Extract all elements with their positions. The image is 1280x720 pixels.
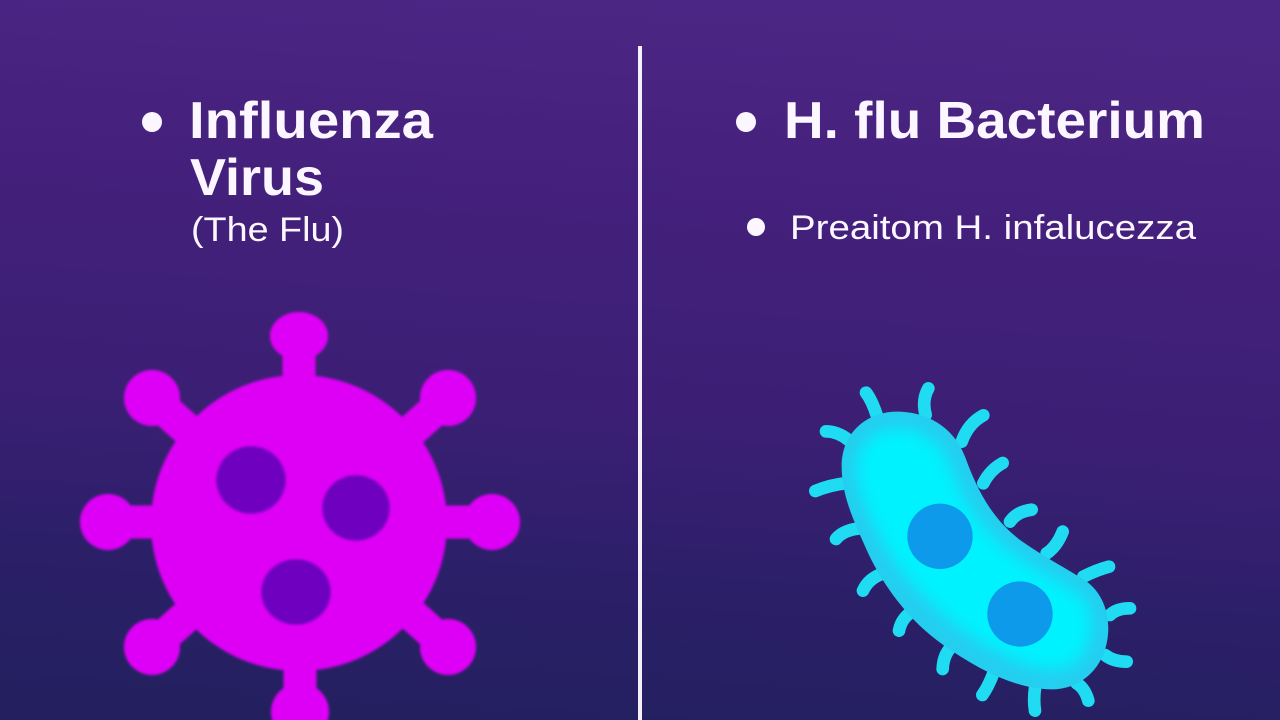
bacterium body highlight — [857, 428, 1091, 669]
bacterium flagella — [815, 388, 1130, 711]
virus inner spots — [216, 446, 390, 625]
virus spikes — [108, 340, 492, 700]
virus spike knobs — [80, 312, 520, 720]
heading line: Virus: Virus — [190, 149, 324, 207]
panel: influenza virus — [80, 92, 520, 720]
bacterium body — [842, 412, 1108, 689]
heading line: Influenza: Influenza — [189, 92, 434, 150]
heading: Influenza Virus — [142, 92, 434, 249]
heading: H. flu Bacterium — [736, 92, 1205, 247]
icon: heading bullet left — [142, 112, 162, 132]
icon: bacterium — [815, 388, 1130, 711]
center divider — [638, 46, 642, 720]
heading line: H. flu Bacterium: H. flu Bacterium — [784, 92, 1205, 150]
icon: virus — [80, 312, 520, 720]
subheading: Preaitom H. infalucezza — [790, 209, 1196, 247]
icon: heading bullet right — [736, 112, 756, 132]
panel: H. flu bacterium — [736, 92, 1205, 711]
subtitle: The Flu: (The Flu) — [191, 211, 344, 249]
bacterium inner spots — [907, 504, 1053, 647]
icon: subheading bullet — [747, 218, 765, 236]
virus body — [151, 375, 447, 671]
